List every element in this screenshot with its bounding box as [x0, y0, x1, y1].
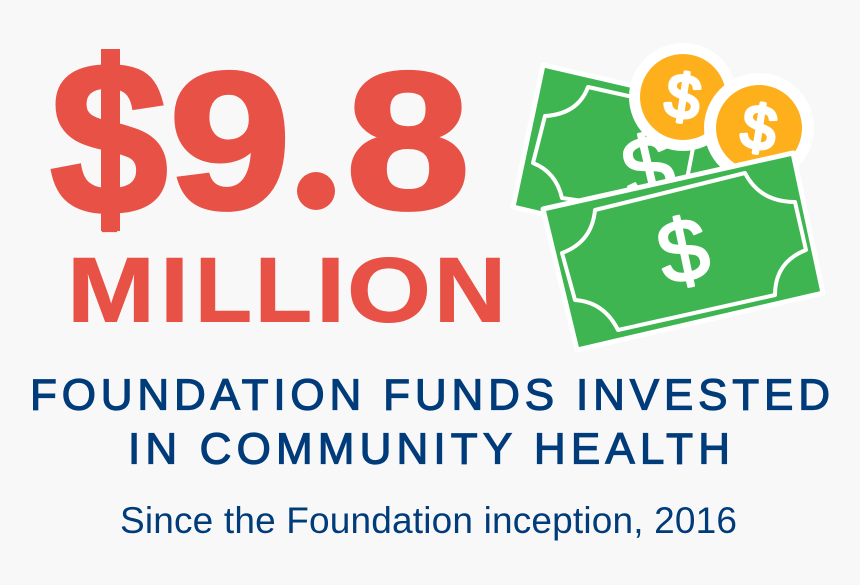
headline amount: $9.8: 8	[346, 32, 470, 250]
back bill	[513, 65, 790, 265]
front bill	[543, 153, 823, 350]
headline unit: MILLION: L	[195, 240, 252, 342]
headline unit: MILLION: M	[67, 240, 155, 342]
headline amount: $9.8: 9	[169, 32, 291, 250]
headline unit: MILLION: I	[160, 240, 189, 342]
icon: money bills and coins	[513, 43, 823, 350]
headline unit: MILLION: I	[316, 240, 345, 342]
front bill: $	[649, 197, 717, 304]
subheading: foundation funds invested in community health: FOUNDATION FUNDS INVESTED	[30, 370, 830, 420]
subheading: foundation funds invested in community health: IN COMMUNITY HEALTH	[128, 424, 730, 474]
coin two: $	[736, 92, 781, 165]
headline unit: MILLION	[67, 240, 506, 342]
headline unit: MILLION: N	[434, 240, 506, 342]
headline amount: $9.8: $	[50, 18, 168, 261]
headline unit: MILLION: L	[255, 240, 312, 342]
coin one	[629, 43, 737, 151]
back bill: $	[613, 114, 683, 221]
coin two	[704, 73, 814, 183]
headline unit: MILLION: O	[347, 240, 431, 342]
note: since the Foundation inception, 2016: Since the Foundation inception, 2016	[120, 500, 737, 541]
headline amount: $9.8: .	[305, 146, 322, 213]
subheading: foundation funds invested in community health	[30, 370, 830, 474]
headline amount: $9.8	[50, 18, 470, 261]
coin one: $	[660, 61, 705, 134]
